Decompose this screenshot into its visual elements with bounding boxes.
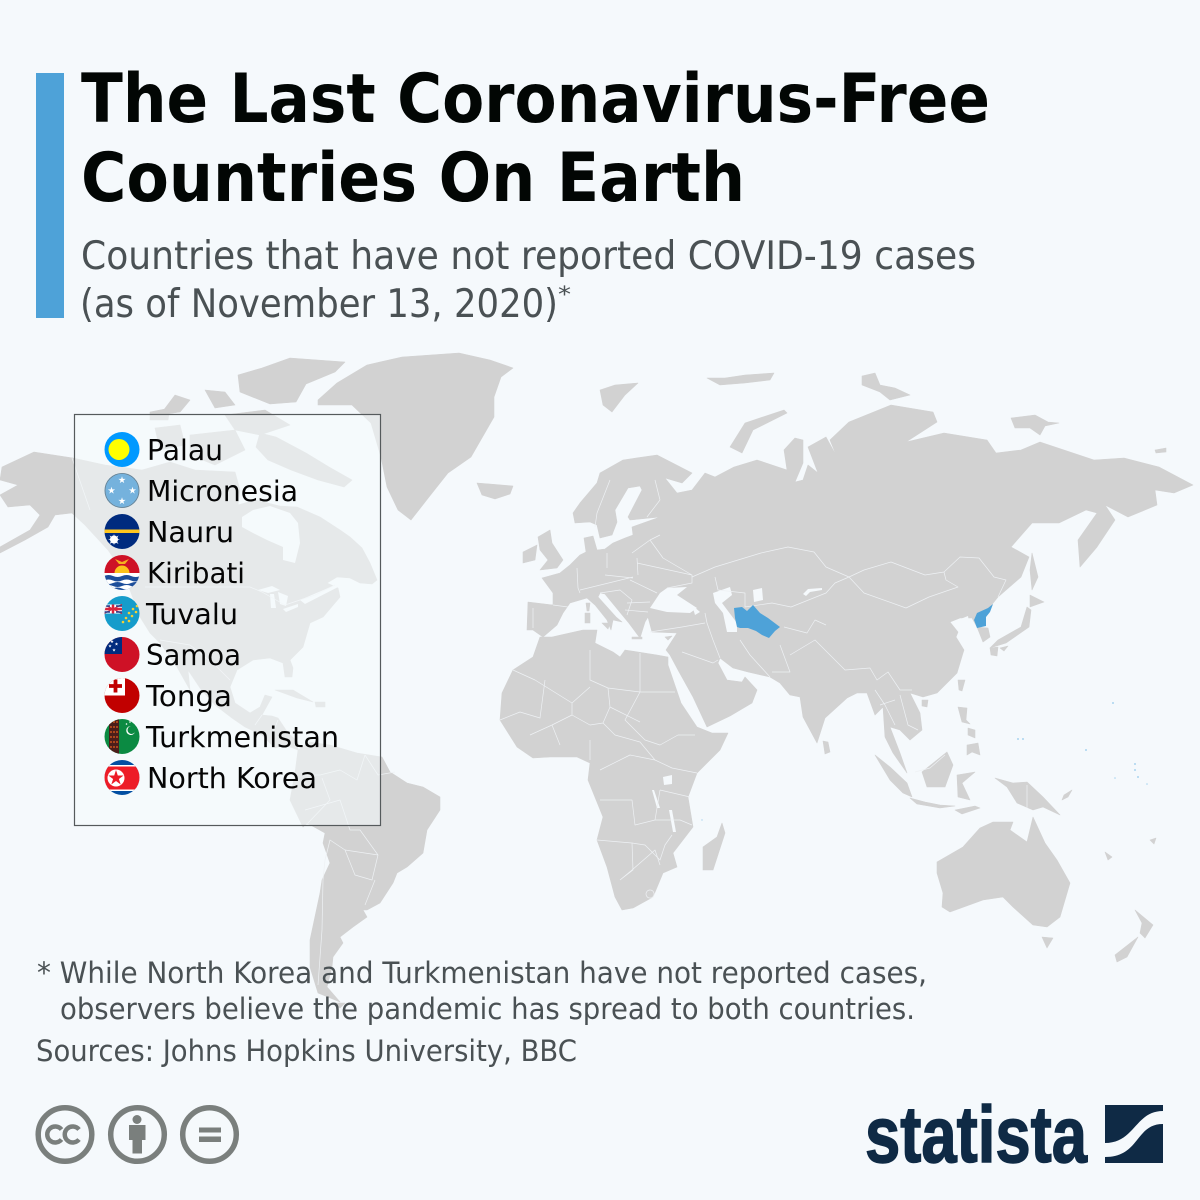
icon: creative commons [38, 1108, 92, 1161]
Hudson Bay and Great Lakes [242, 506, 342, 612]
legend entry: Tuvalu: Tuvalu [145, 598, 238, 631]
statista logo: statista [865, 1090, 1087, 1179]
islands of Europe and the Arctic [477, 373, 1166, 640]
subtitle: Countries that have not reported COVID-19 cases [81, 234, 976, 279]
inland seas of Eurasia and Africa [650, 587, 970, 832]
legend entry: Samoa: Samoa [146, 639, 241, 672]
legend entry: Palau [104, 431, 223, 467]
legend entry: Nauru: Nauru [147, 516, 234, 549]
South America [290, 742, 440, 1008]
footnote: observers believe the pandemic has spread to both countries. [60, 992, 915, 1026]
legend entry: Tuvalu [104, 595, 238, 631]
legend entry: Kiribati [104, 554, 245, 592]
legend entry: Tonga [104, 678, 232, 714]
legend entry: Samoa [104, 636, 241, 672]
legend entry: Tonga: Tonga [145, 680, 232, 713]
North America [0, 452, 377, 750]
sources: Sources: Johns Hopkins University, BBC [36, 1034, 577, 1068]
icon: no derivatives [183, 1108, 236, 1161]
Africa [500, 630, 728, 910]
legend entry: Micronesia: Micronesia [147, 475, 298, 508]
East Asia, Southeast Asia and Oceania [823, 553, 1156, 962]
footnote: * While North Korea and Turkmenistan have not reported cases, [37, 956, 927, 990]
subtitle: * [558, 283, 571, 308]
Turkmenistan highlight [734, 605, 780, 638]
Eurasia [527, 405, 1193, 773]
legend entry: Nauru [104, 513, 234, 549]
subtitle: (as of November 13, 2020) [80, 282, 558, 327]
footnote [37, 956, 927, 1026]
accent bar [36, 73, 64, 318]
North Korea highlight [974, 604, 993, 628]
legend entry: Palau: Palau [147, 434, 223, 467]
legend panel [74, 414, 380, 826]
title: The Last Coronavirus-Free [81, 60, 990, 139]
title: Countries On Earth [81, 139, 745, 218]
world map [0, 353, 1193, 1008]
legend entry: Turkmenistan: Turkmenistan [145, 721, 339, 754]
small island countries highlighted [701, 702, 1148, 821]
Arctic Canada and Greenland [150, 353, 513, 707]
subtitle [80, 234, 976, 327]
title [81, 60, 990, 218]
icon: attribution [111, 1108, 164, 1161]
legend entry: Kiribati: Kiribati [147, 557, 245, 590]
legend entry: North Korea: North Korea [147, 762, 317, 795]
country borders [72, 458, 335, 735]
